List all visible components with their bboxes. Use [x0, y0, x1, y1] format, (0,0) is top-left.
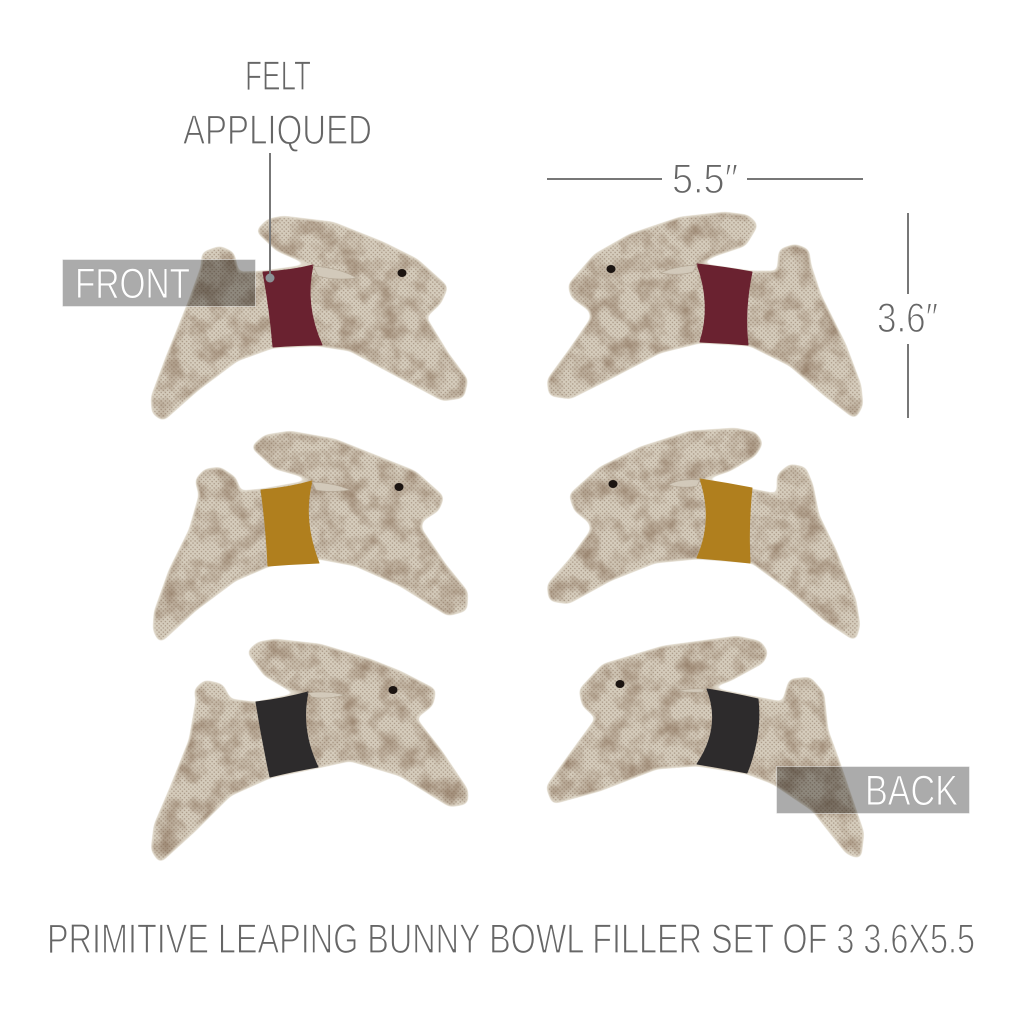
label: back: BACK: [865, 767, 958, 815]
callout: felt appliqued: APPLIQUED: [183, 106, 372, 153]
label: back: [776, 766, 970, 815]
bunny: back black: [547, 637, 863, 858]
dimension: height 3.6 inches: 3.6″: [877, 294, 938, 341]
dimension: width 5.5 inches: 5.5″: [672, 155, 738, 202]
callout: felt appliqued: [183, 52, 372, 282]
mustard felt band: [261, 481, 319, 566]
maroon felt band: [697, 264, 752, 345]
bunny: back mustard: [548, 429, 859, 640]
label: front: FRONT: [75, 260, 190, 308]
bunny: front maroon: [152, 217, 467, 420]
black felt band: [697, 689, 759, 773]
maroon felt band: [263, 265, 322, 347]
mustard felt band: [697, 479, 752, 563]
bunny: back maroon: [548, 213, 862, 418]
bunny: front mustard: [154, 432, 467, 642]
callout: felt appliqued: FELT: [245, 52, 311, 99]
black felt band: [256, 692, 318, 777]
bunny: front black: [152, 640, 467, 862]
